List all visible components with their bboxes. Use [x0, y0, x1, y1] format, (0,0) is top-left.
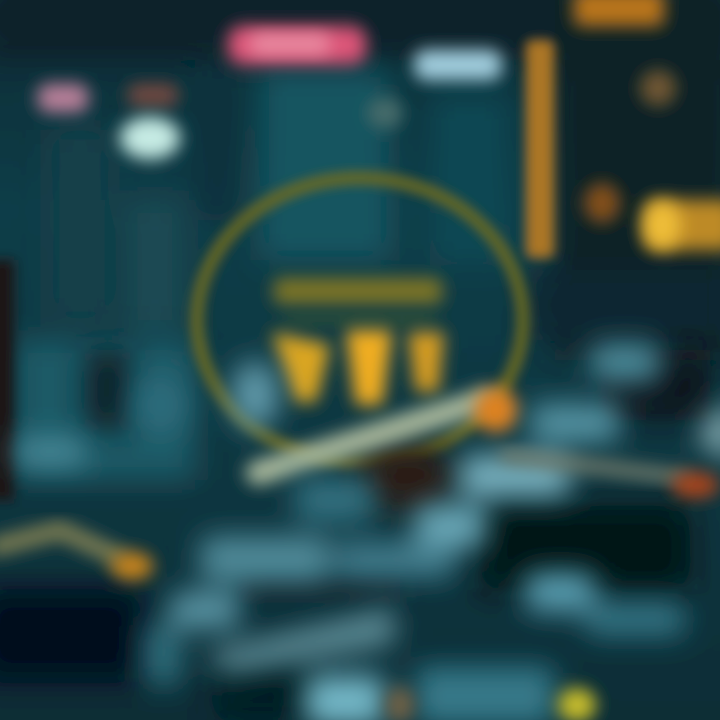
neon signs	[38, 0, 720, 258]
background buildings	[0, 0, 720, 480]
ring	[197, 178, 523, 462]
foreground stacks	[15, 342, 720, 720]
sign: small pink	[38, 84, 88, 112]
central emblem	[197, 178, 523, 510]
sign: yellow glow right	[645, 200, 720, 250]
sign: pink centre highlight	[250, 34, 330, 54]
sign: small amber	[640, 70, 676, 106]
left dark strip	[0, 260, 14, 500]
sign: pink top	[228, 26, 366, 64]
temple columns	[272, 330, 444, 405]
left ledge	[0, 530, 125, 560]
temple band	[285, 312, 435, 324]
right ledge	[500, 455, 690, 478]
sign: orange top	[574, 0, 664, 26]
sign: amber round	[584, 183, 620, 223]
sign: light blue	[414, 50, 502, 80]
temple roof	[274, 278, 442, 304]
sign: small brown	[128, 84, 178, 106]
sign: white glow	[120, 117, 180, 159]
dark foreground masses	[0, 350, 710, 720]
bottom brown light	[386, 687, 414, 720]
tube	[258, 400, 485, 473]
sign: faint window	[367, 97, 403, 129]
bottom yellow light	[558, 688, 596, 720]
sign: bright yellow	[643, 201, 681, 249]
dark shadow below tube	[355, 446, 455, 510]
right orange light	[671, 472, 719, 498]
left orange light	[111, 552, 153, 580]
tube tip	[474, 388, 518, 432]
sign: orange vertical	[526, 40, 554, 258]
